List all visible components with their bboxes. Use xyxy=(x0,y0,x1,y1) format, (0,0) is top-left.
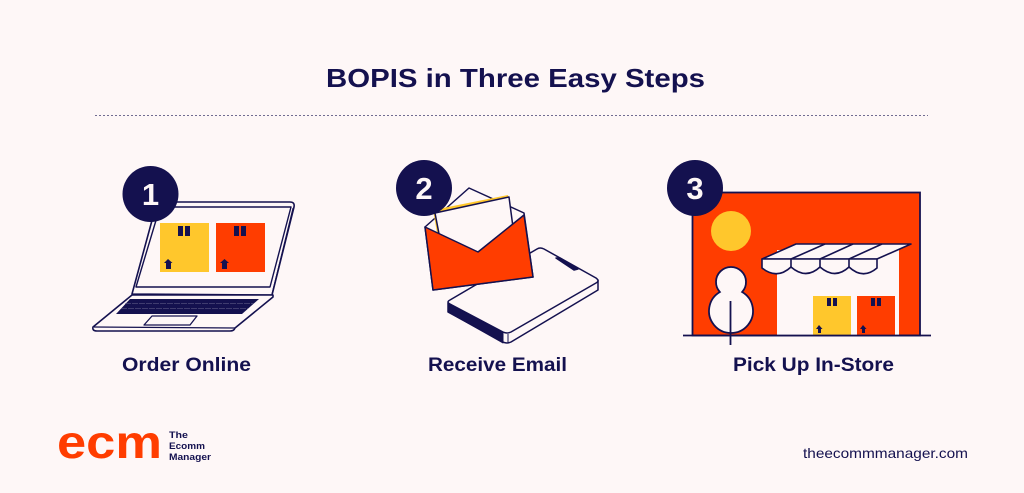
icon: yellow box on screen xyxy=(160,223,209,272)
website url: theecommmanager.com xyxy=(803,445,968,461)
label: receive email: Receive Email xyxy=(428,355,567,376)
ground line xyxy=(683,334,931,336)
logo: ecm xyxy=(57,416,211,468)
label: pick up in-store: Pick Up In-Store xyxy=(733,355,894,376)
label: order online: Order Online xyxy=(122,355,251,376)
sun xyxy=(711,211,751,251)
doorway xyxy=(777,250,899,335)
number badge 3: 3 xyxy=(686,171,704,206)
awning xyxy=(762,244,911,274)
number badge 2 xyxy=(396,160,452,216)
number badge 3 xyxy=(667,160,723,216)
logo: ecm: The xyxy=(169,430,188,441)
trackpad xyxy=(144,316,197,325)
number badge 1 xyxy=(122,166,178,222)
icon: phone xyxy=(448,248,598,343)
logo: ecm: Manager xyxy=(169,452,211,463)
panel: step 2 receive email xyxy=(396,160,598,376)
icon: laptop xyxy=(93,202,294,331)
title: BOPIS in Three Easy Steps xyxy=(326,63,705,93)
yellow box xyxy=(813,296,851,335)
icon: envelope xyxy=(425,188,533,290)
icon: tree xyxy=(709,267,753,345)
number badge 1: 1 xyxy=(142,177,159,212)
panel: step 3 pick up in-store xyxy=(667,160,931,376)
red box xyxy=(857,296,895,335)
icon: store xyxy=(683,192,931,336)
logo: ecm: Ecomm xyxy=(169,441,205,452)
icon: red box on screen xyxy=(216,223,265,272)
panel: step 1 order online xyxy=(93,166,294,376)
number badge 2: 2 xyxy=(415,171,433,206)
keyboard xyxy=(116,299,259,314)
logo: ecm: ecm xyxy=(57,416,162,468)
